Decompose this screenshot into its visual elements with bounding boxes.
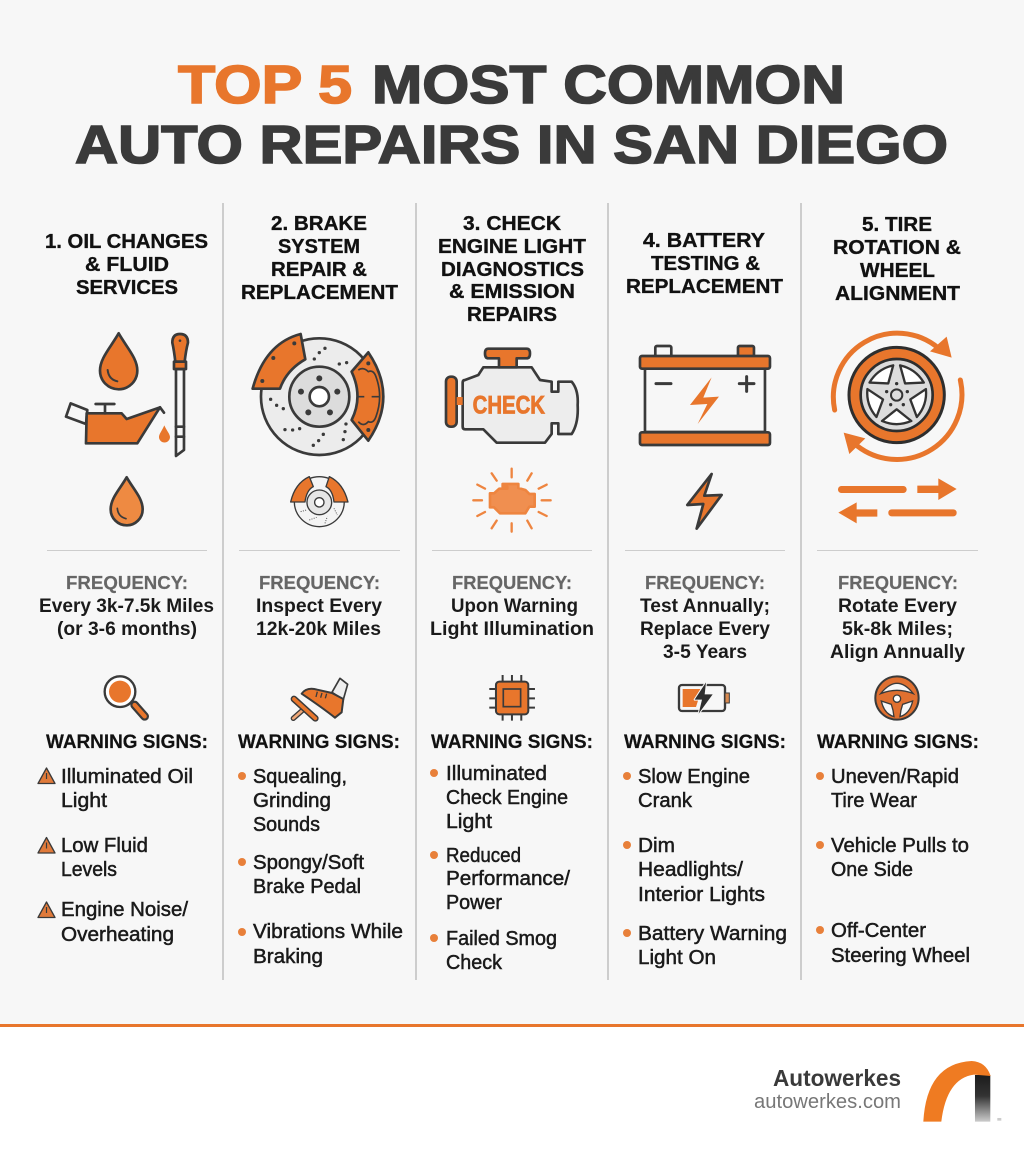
warning signs: brake system: Grinding [253,789,331,812]
frequency: battery [640,573,770,663]
icon: check engine [446,349,578,532]
icon: warning triangle [38,838,55,853]
frequency: oil changes: FREQUENCY: [66,573,188,593]
icon: oil drop, can and dipstick [66,333,188,525]
icon: brake disc and pads [253,334,383,527]
warning signs: battery: Dim [638,834,675,857]
warning signs: brake system: Squealing, [253,765,347,788]
heading: brake system: REPAIR & [271,258,367,281]
title: TOP 5 [178,55,352,115]
frequency: check engine light: Upon Warning [451,595,578,617]
heading: oil changes: & FLUID [85,253,169,276]
heading: battery [626,229,783,298]
warning signs: battery: Slow Engine [638,765,750,788]
warning signs: oil changes: Levels [61,858,117,881]
heading: brake system: 2. BRAKE [271,212,367,235]
icon: alignment arrows [838,478,957,523]
icon: computer chip [489,675,535,721]
frequency: tire rotation: Align Annually [830,641,965,663]
frequency: battery: Test Annually; [640,595,770,617]
warning signs: brake system: Vibrations While [253,920,403,943]
footer brand text [754,1065,901,1113]
warning signs: battery: Battery Warning [638,922,787,945]
heading: battery: 4. BATTERY [643,229,765,252]
heading: tire rotation: ROTATION & [833,236,961,259]
warning signs: battery: Interior Lights [638,883,765,906]
warning signs: tire rotation: Tire Wear [831,789,917,812]
heading: battery: REPLACEMENT [626,275,783,298]
warning signs: check engine light: Check [446,951,503,974]
heading: tire rotation [833,213,961,305]
frequency: brake system [256,573,382,640]
heading: oil changes [45,230,208,299]
footer brand text: Autowerkes [773,1065,901,1091]
frequency: check engine light [430,573,594,640]
warning signs: check engine light: Failed Smog [446,927,557,950]
frequency: oil changes: (or 3-6 months) [57,618,197,640]
heading: oil changes: 1. OIL CHANGES [45,230,208,253]
icon: tire with rotation arrows [833,333,962,459]
warning signs: tire rotation [816,731,979,967]
warning signs: check engine light: Reduced [446,844,521,867]
warning signs: check engine light: WARNING SIGNS: [431,731,593,753]
heading: check engine light: REPAIRS [467,303,557,326]
frequency: battery: 3-5 Years [663,641,747,663]
heading: check engine light: ENGINE LIGHT [438,235,586,258]
panel: tire rotation [816,213,979,967]
panel: oil changes [38,230,214,946]
warning signs: tire rotation: One Side [831,858,913,881]
warning signs: battery: Headlights/ [638,858,743,881]
warning signs: oil changes: Light [61,789,107,812]
heading: oil changes: SERVICES [76,276,178,299]
heading: tire rotation: 5. TIRE [862,213,932,236]
warning signs: brake system [238,731,403,968]
warning signs: check engine light: Power [446,891,502,914]
title [75,55,948,175]
heading: brake system [241,212,398,304]
warning signs: tire rotation: Vehicle Pulls to [831,834,969,857]
warning signs: oil changes: Illuminated Oil [61,765,193,788]
frequency: tire rotation: FREQUENCY: [838,573,958,593]
frequency: brake system: FREQUENCY: [259,573,380,593]
frequency: oil changes [39,573,214,640]
icon: charging battery [679,682,729,714]
icon: magnifying glass [105,676,145,716]
heading: check engine light: 3. CHECK [463,212,561,235]
frequency: battery: FREQUENCY: [645,573,765,593]
frequency: tire rotation: Rotate Every [838,595,957,617]
frequency: battery: Replace Every [640,618,770,640]
warning signs: check engine light: Illuminated [446,762,547,785]
warning signs: check engine light: Light [446,810,492,833]
warning signs: check engine light: Performance/ [446,867,570,890]
heading: battery: TESTING & [651,252,760,275]
warning signs: check engine light: Check Engine [446,786,568,809]
warning signs: tire rotation: Off-Center [831,919,926,942]
frequency: tire rotation: 5k-8k Miles; [842,618,953,640]
warning signs: brake system: Sounds [253,813,320,836]
warning signs: check engine light [430,731,593,974]
heading: brake system: SYSTEM [278,235,360,258]
heading: tire rotation: WHEEL [860,259,935,282]
frequency: tire rotation [830,573,965,663]
footer [0,1024,1024,1154]
warning signs: tire rotation: Uneven/Rapid [831,765,959,788]
heading: check engine light [438,212,586,326]
heading: brake system: REPLACEMENT [241,281,398,304]
warning signs: brake system: Brake Pedal [253,875,361,898]
warning signs: oil changes: Engine Noise/ [61,898,188,921]
warning signs: battery: Crank [638,789,693,812]
warning signs: battery [623,731,787,969]
warning signs: brake system: Braking [253,945,323,968]
warning signs: tire rotation: WARNING SIGNS: [817,731,979,753]
warning signs: oil changes: Overheating [61,923,174,946]
warning signs: oil changes: Low Fluid [61,834,148,857]
warning signs: tire rotation: Steering Wheel [831,944,970,967]
warning signs: brake system: Spongy/Soft [253,851,364,874]
frequency: brake system: Inspect Every [256,595,382,617]
heading: check engine light: & EMISSION [449,280,575,303]
warning signs: brake system: WARNING SIGNS: [238,731,400,753]
footer brand text: autowerkes.com [754,1091,901,1113]
heading: check engine light: DIAGNOSTICS [441,258,584,281]
panel: check engine light [430,212,594,974]
frequency: brake system: 12k-20k Miles [256,618,381,640]
icon: check engine: CHECK [473,391,546,419]
warning signs: battery: WARNING SIGNS: [624,731,786,753]
icon: foot on brake pedal [293,678,348,718]
warning signs: oil changes [38,731,208,946]
title: MOST COMMON [372,55,845,115]
frequency: check engine light: FREQUENCY: [452,573,572,593]
frequency: check engine light: Light Illumination [430,618,594,640]
frequency: oil changes: Every 3k-7.5k Miles [39,595,214,617]
icon: steering wheel [875,676,919,720]
warning signs: battery: Light On [638,946,716,969]
heading: tire rotation: ALIGNMENT [835,282,960,305]
icon: warning triangle [38,902,55,918]
icon: car battery [640,346,770,529]
panel: battery [623,229,787,969]
panel: brake system [238,212,403,968]
warning signs: oil changes: WARNING SIGNS: [46,731,208,753]
title: AUTO REPAIRS IN SAN DIEGO [75,115,948,175]
icon: warning triangle [38,768,55,784]
logo: arch [923,1061,1001,1122]
